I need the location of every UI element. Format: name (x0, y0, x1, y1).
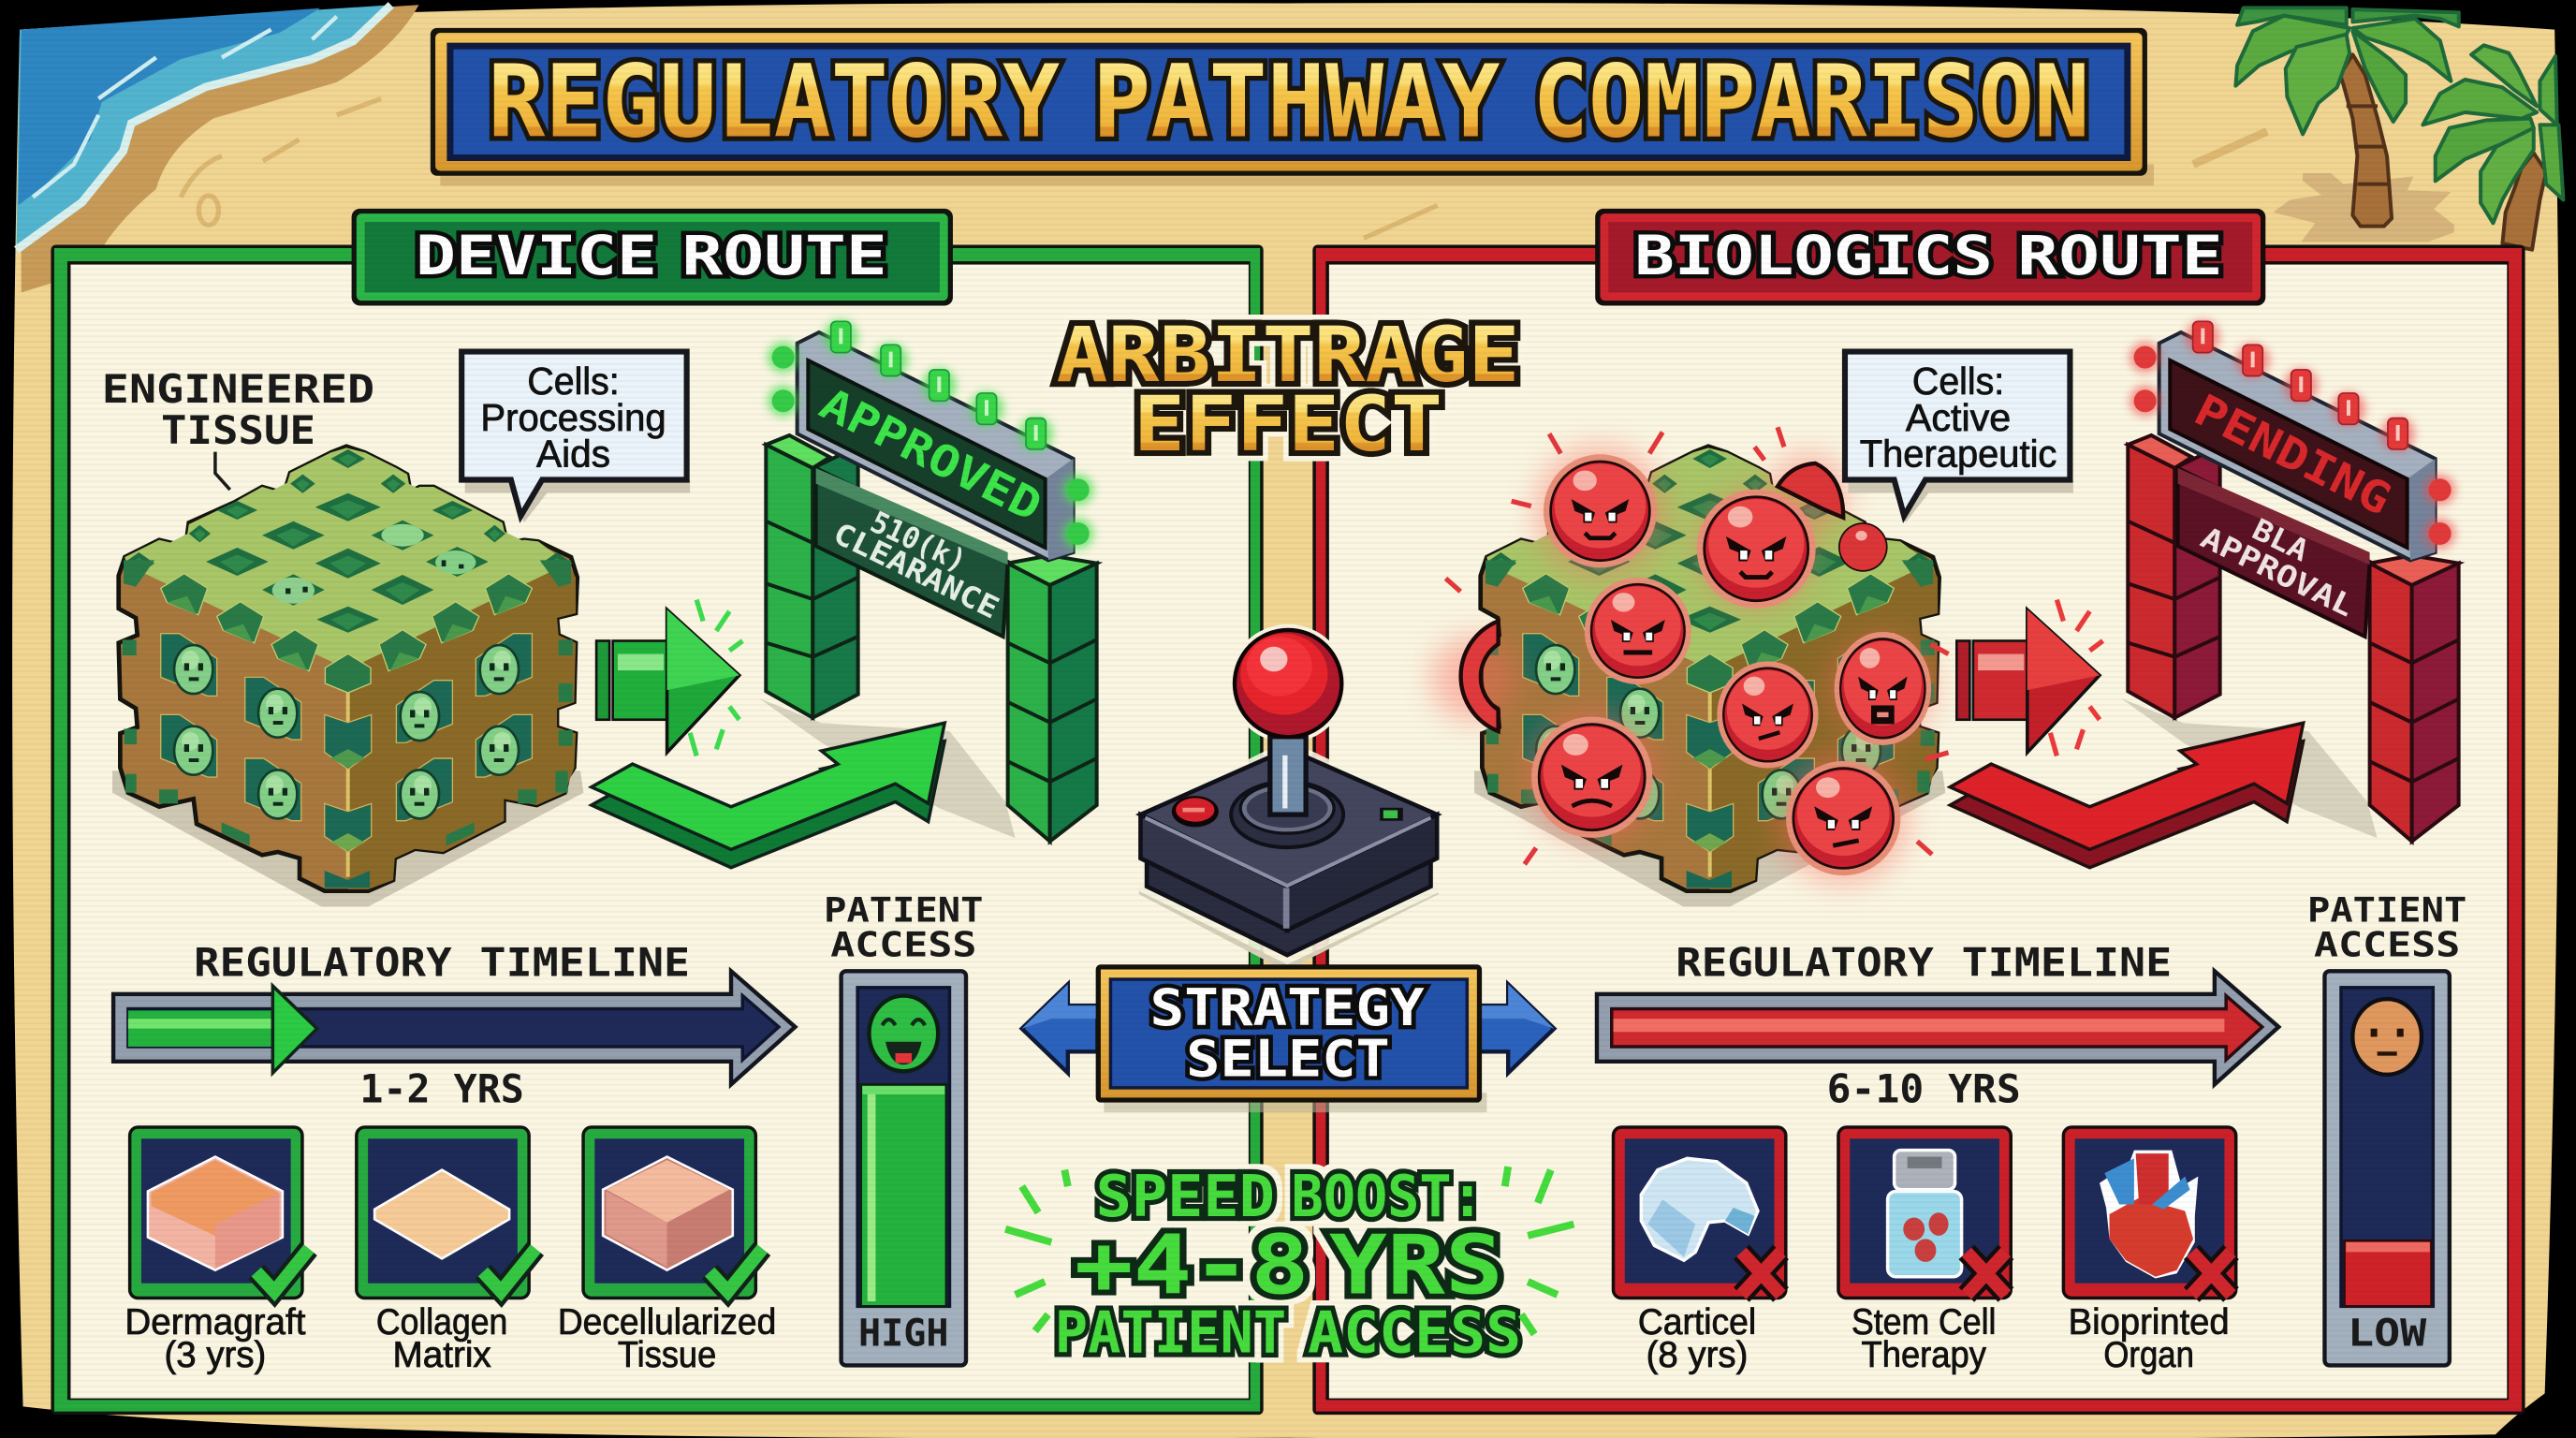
approval gate shadow (759, 698, 1016, 838)
motion sparks (690, 600, 742, 756)
icon: collagen tile (374, 1170, 509, 1258)
regulatory timeline: biologics (1597, 940, 2278, 1112)
timeline heading (1676, 940, 2172, 986)
progress fill (128, 986, 317, 1073)
gate: approved (766, 320, 1097, 842)
speech bubble: active therapeutic: Cells: (1912, 360, 2004, 403)
icon: x mark (1967, 1252, 2006, 1295)
engineered tissue label (102, 366, 374, 490)
title text: COMPARISON (1533, 45, 2089, 161)
card label: (8 yrs) (1647, 1335, 1748, 1375)
select box (1096, 964, 1482, 1103)
card label (376, 1302, 507, 1375)
patient access meter: high: ACCESS (830, 924, 976, 964)
pending gate shadow (2121, 698, 2378, 838)
happy face (869, 996, 938, 1071)
bubble shadow (1848, 479, 2073, 522)
timeline heading: TIMELINE (1962, 940, 2172, 986)
panel background (70, 265, 1249, 1399)
device route label (416, 224, 887, 287)
banner shadow (440, 165, 2154, 185)
speech bubble: processing aids: Processing (480, 396, 666, 439)
foam line (17, 5, 391, 250)
speech bubble: processing aids (461, 352, 690, 522)
partial cell behind (1778, 463, 1843, 518)
water (17, 5, 391, 250)
right pillar (1008, 555, 1097, 842)
speech bubble: active therapeutic (1845, 352, 2073, 522)
agitation sparks (1445, 427, 1949, 864)
icon: x mark (1741, 1252, 1781, 1295)
icon: cartilage (1641, 1158, 1758, 1260)
red button (1172, 796, 1219, 827)
product card: dermagraft (124, 1125, 309, 1375)
boost text: ACCESS (1308, 1299, 1521, 1366)
boost text: PATIENT (1055, 1299, 1286, 1366)
biologics route tab (1595, 209, 2265, 305)
banner frame (431, 28, 2147, 176)
title text (488, 45, 2089, 161)
sand marks (181, 98, 2267, 238)
boost text (1055, 1164, 1521, 1366)
product card: bioprinted organ (2062, 1125, 2237, 1375)
speed boost callout (1005, 1164, 1573, 1366)
wet sand band (20, 5, 419, 292)
boost text: +4-8 (1075, 1217, 1310, 1313)
approved sign: APPROVED (812, 379, 1049, 532)
strategy select (1022, 964, 1554, 1112)
boost sparks (1005, 1167, 1573, 1334)
approved sign (798, 332, 1074, 560)
timeline heading: TIMELINE (479, 940, 690, 986)
card label: Stem Cell (1852, 1302, 1996, 1343)
speech bubble: active therapeutic: Therapeutic (1860, 432, 2056, 475)
title text: PATHWAY (1092, 45, 1500, 161)
meter heading: PATIENT (824, 890, 983, 931)
title banner (431, 28, 2154, 185)
small green arrow (596, 600, 742, 756)
device route tab (352, 209, 953, 305)
meter label: LOW (2348, 1311, 2427, 1355)
left pillar (2128, 435, 2220, 718)
meter bar (861, 1084, 946, 1306)
icon: skin block (148, 1157, 283, 1270)
green led (1380, 808, 1403, 821)
select box shadow (1104, 1093, 1486, 1112)
clearance sign: 510(k) (865, 506, 972, 579)
panel frame (51, 245, 1264, 1415)
clearance sign (816, 468, 1008, 637)
engineered tissue label: ENGINEERED (102, 366, 374, 412)
sign lights (2130, 320, 2455, 550)
card label (1638, 1302, 1756, 1375)
active cells (1544, 454, 1657, 567)
palm tree 1 (2235, 7, 2459, 227)
engineered tissue label: TISSUE (161, 407, 315, 453)
arbitrage effect heading: EFFECT (1134, 381, 1442, 469)
left arrow (1022, 984, 1097, 1073)
card label: Organ (2103, 1335, 2194, 1375)
motion sparks (2050, 600, 2103, 756)
beach water corner (17, 5, 419, 292)
card label: Collagen (376, 1302, 507, 1343)
patient access meter: low (2307, 890, 2466, 1365)
icon: x mark (2191, 1252, 2231, 1295)
arbitrage effect heading (1057, 312, 1519, 469)
icon: vial (1888, 1151, 1962, 1277)
progress fill (1612, 996, 2262, 1060)
card label (124, 1302, 306, 1375)
neutral face (2352, 999, 2422, 1075)
pending sign (2159, 332, 2436, 560)
meter frame (842, 971, 966, 1365)
engineered tissue cube: device (112, 447, 583, 906)
strategy select: SELECT (1186, 1030, 1390, 1089)
clearance sign: CLEARANCE (827, 517, 1003, 626)
product card: carticel (1612, 1125, 1788, 1375)
boost text: BOOST: (1292, 1164, 1484, 1230)
joystick (1135, 624, 1444, 964)
meter heading: PATIENT (2307, 890, 2466, 931)
patient access meter: high (824, 890, 983, 1365)
biologics route label: BIOLOGICS (1634, 224, 1993, 287)
gate: pending (2128, 320, 2459, 842)
palm trees (2235, 7, 2563, 250)
shaft (1270, 737, 1306, 814)
card label (2069, 1302, 2230, 1375)
regulatory timeline: device (113, 940, 795, 1112)
timeline heading: REGULATORY (1676, 940, 1934, 986)
duration: 6-10 YRS (1827, 1066, 2021, 1112)
ball halo (1229, 624, 1347, 742)
duration: 1-2 YRS (359, 1066, 524, 1112)
icon: check (256, 1249, 309, 1292)
meter bar (2345, 1240, 2432, 1306)
boost text: SPEED (1096, 1164, 1275, 1230)
water streaks (33, 17, 337, 198)
card label: Bioprinted (2069, 1302, 2230, 1343)
card label: (3 yrs) (165, 1335, 266, 1375)
select text: STRATEGY (1150, 978, 1425, 1037)
card label: Carticel (1638, 1302, 1756, 1343)
card label: Dermagraft (124, 1302, 306, 1343)
meter frame (2324, 971, 2450, 1365)
speech bubble: processing aids: Cells: (527, 360, 620, 403)
arbitrage effect heading: ARBITRAGE (1057, 312, 1519, 400)
product card: collagen matrix (355, 1125, 535, 1375)
card label (558, 1302, 776, 1375)
device route label: ROUTE (681, 224, 887, 287)
base sides (1140, 814, 1287, 930)
palm tree 2 (2422, 45, 2563, 250)
cells on top face (272, 524, 476, 604)
ball (1233, 628, 1343, 739)
right arrow (1479, 984, 1554, 1073)
biologics route label (1634, 224, 2223, 287)
palm shadow (2273, 173, 2454, 242)
card label (1852, 1302, 1996, 1375)
panel background (1329, 265, 2507, 1399)
timeline arrow (1597, 971, 2278, 1084)
product card: decellularized tissue (558, 1125, 776, 1375)
big green arrow (592, 723, 944, 868)
big red arrow (1950, 723, 2304, 868)
title text: REGULATORY (488, 45, 1061, 161)
right pillar (2370, 555, 2459, 842)
panel: biologics route (1312, 245, 2525, 1415)
icon: heart (2100, 1151, 2198, 1278)
engineered tissue cube: biologics (1431, 427, 1949, 906)
deep water (18, 8, 320, 205)
product card: stem cell therapy (1837, 1125, 2012, 1375)
card label: Decellularized (558, 1302, 776, 1343)
base halo (1135, 740, 1444, 964)
timeline heading: REGULATORY (194, 940, 452, 986)
timeline heading (194, 940, 690, 986)
timeline arrow (113, 971, 795, 1084)
patient access meter: low: ACCESS (2314, 924, 2460, 964)
bla sign: APPROVAL (2195, 521, 2359, 624)
base collar (1231, 782, 1343, 847)
base shadow (1139, 883, 1439, 964)
meter label: HIGH (858, 1311, 949, 1355)
panel: device route (51, 245, 1264, 1415)
bubble shadow (465, 479, 690, 522)
sign lights (768, 320, 1093, 550)
partial cell left edge (1461, 621, 1499, 731)
speech bubble: active therapeutic: Active (1906, 396, 2011, 439)
banner fill (453, 50, 2124, 154)
pending sign: PENDING (2187, 386, 2398, 526)
left pillar (766, 435, 858, 718)
icon: tissue block (603, 1157, 733, 1270)
device route label: DEVICE (416, 224, 657, 287)
panel frame (1312, 245, 2525, 1415)
card label: Matrix (392, 1335, 491, 1375)
card label: Tissue (618, 1335, 716, 1375)
card label: Therapy (1862, 1335, 1987, 1375)
lower plate (1147, 858, 1430, 955)
bla sign (2178, 468, 2370, 637)
icon: check (710, 1249, 762, 1292)
glow around cells (1431, 446, 1936, 884)
biologics route label: ROUTE (2017, 224, 2223, 287)
icon: check (483, 1249, 535, 1292)
small red arrow (1956, 600, 2103, 756)
base top (1140, 749, 1437, 887)
speech bubble: processing aids: Aids (536, 432, 610, 475)
boost text: YRS (1329, 1217, 1503, 1313)
bla sign: BLA (2247, 513, 2314, 568)
